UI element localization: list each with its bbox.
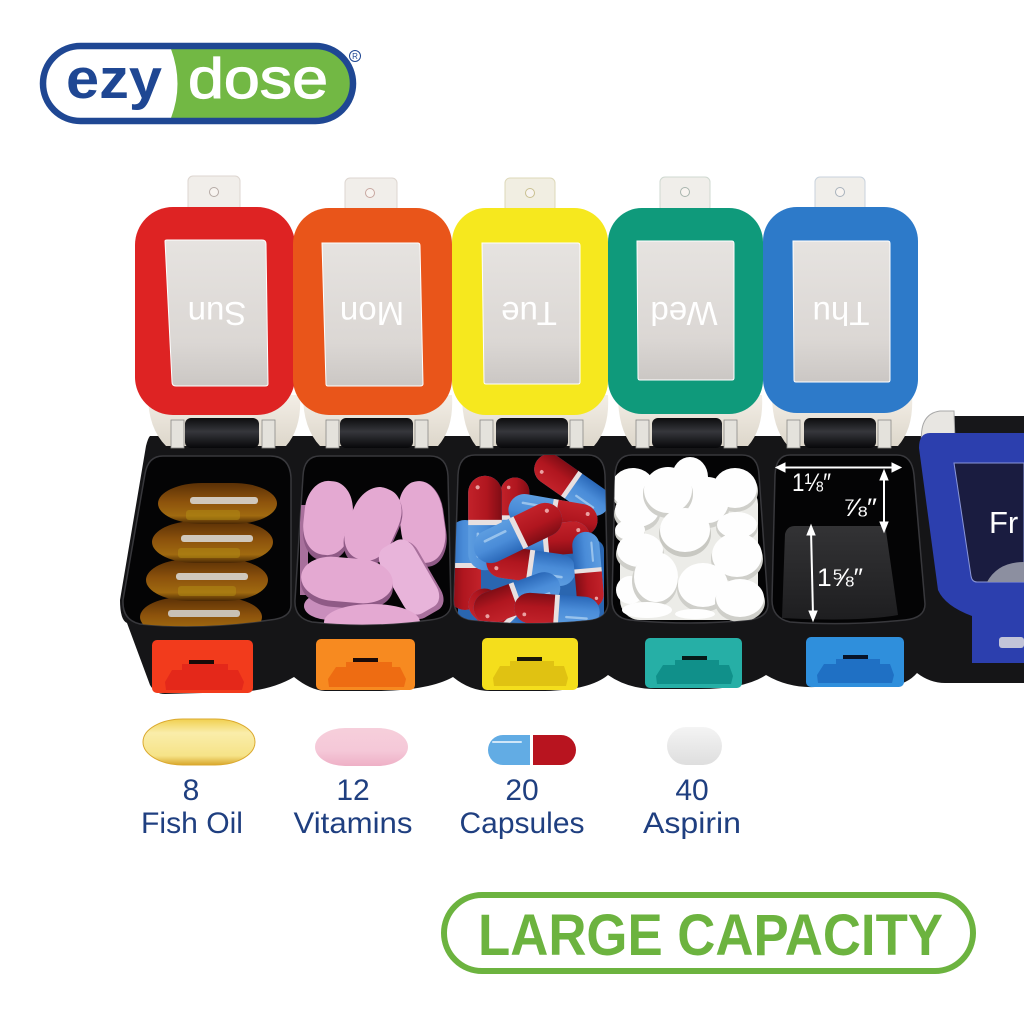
lid: Thursday blue: Thu bbox=[813, 295, 869, 332]
lid: Sunday red bbox=[135, 176, 300, 446]
lid: Sunday red: Sun bbox=[188, 295, 246, 332]
compartment: fish oil bbox=[123, 456, 291, 637]
legend: fish oil: 8 bbox=[183, 774, 199, 807]
latches bbox=[152, 637, 904, 693]
dimension labels: 1⅛″ bbox=[792, 469, 831, 497]
compartment: capsules bbox=[453, 454, 609, 624]
logo: ezy dose bbox=[43, 46, 360, 121]
legend: capsules bbox=[460, 735, 584, 840]
legend: fish oil: Fish Oil bbox=[141, 807, 243, 840]
lid: Wednesday green: Wed bbox=[650, 295, 718, 332]
legend: aspirin bbox=[643, 727, 741, 840]
latch: yellow bbox=[482, 638, 578, 690]
legend: aspirin: 40 bbox=[675, 774, 709, 807]
legend: capsules: 20 bbox=[505, 774, 539, 807]
compartment: vitamins bbox=[295, 456, 451, 640]
lid: Wednesday green bbox=[608, 177, 763, 446]
badge: large capacity: LARGE CAPACITY bbox=[478, 903, 943, 968]
logo: ezy dose: dose bbox=[188, 47, 328, 111]
lid: Friday closed blue: Fr bbox=[989, 505, 1018, 540]
lid: Monday orange: Mon bbox=[340, 295, 404, 332]
compartment: aspirin bbox=[611, 455, 768, 623]
legend: capsules: Capsules bbox=[460, 807, 584, 840]
dimension arrows bbox=[776, 463, 901, 621]
latch: teal bbox=[645, 638, 742, 688]
dimension labels bbox=[792, 469, 877, 592]
legend: vitamins: Vitamins bbox=[294, 807, 412, 840]
lid: Tuesday yellow: Tue bbox=[501, 295, 557, 332]
legend: vitamins: 12 bbox=[336, 774, 370, 807]
lid: Monday orange bbox=[293, 178, 452, 446]
lid: Thursday blue bbox=[763, 177, 918, 446]
hinges bbox=[171, 418, 891, 448]
tray base bbox=[120, 436, 1024, 694]
legend: vitamins bbox=[294, 728, 412, 840]
lid: Tuesday yellow bbox=[452, 178, 608, 446]
legend: fish oil bbox=[141, 719, 255, 840]
logo: ezy dose: R bbox=[352, 52, 358, 61]
compartment: empty with dimensions bbox=[772, 455, 925, 624]
legend: aspirin: Aspirin bbox=[643, 807, 741, 840]
dimension labels: 1⅝″ bbox=[817, 564, 863, 592]
dimension labels: ⅞″ bbox=[843, 494, 877, 522]
lid: Friday closed blue bbox=[919, 411, 1024, 663]
latch: red bbox=[152, 640, 253, 693]
latch: orange bbox=[316, 639, 415, 690]
latch: blue bbox=[806, 637, 904, 687]
logo: ezy dose: ezy bbox=[66, 47, 162, 111]
